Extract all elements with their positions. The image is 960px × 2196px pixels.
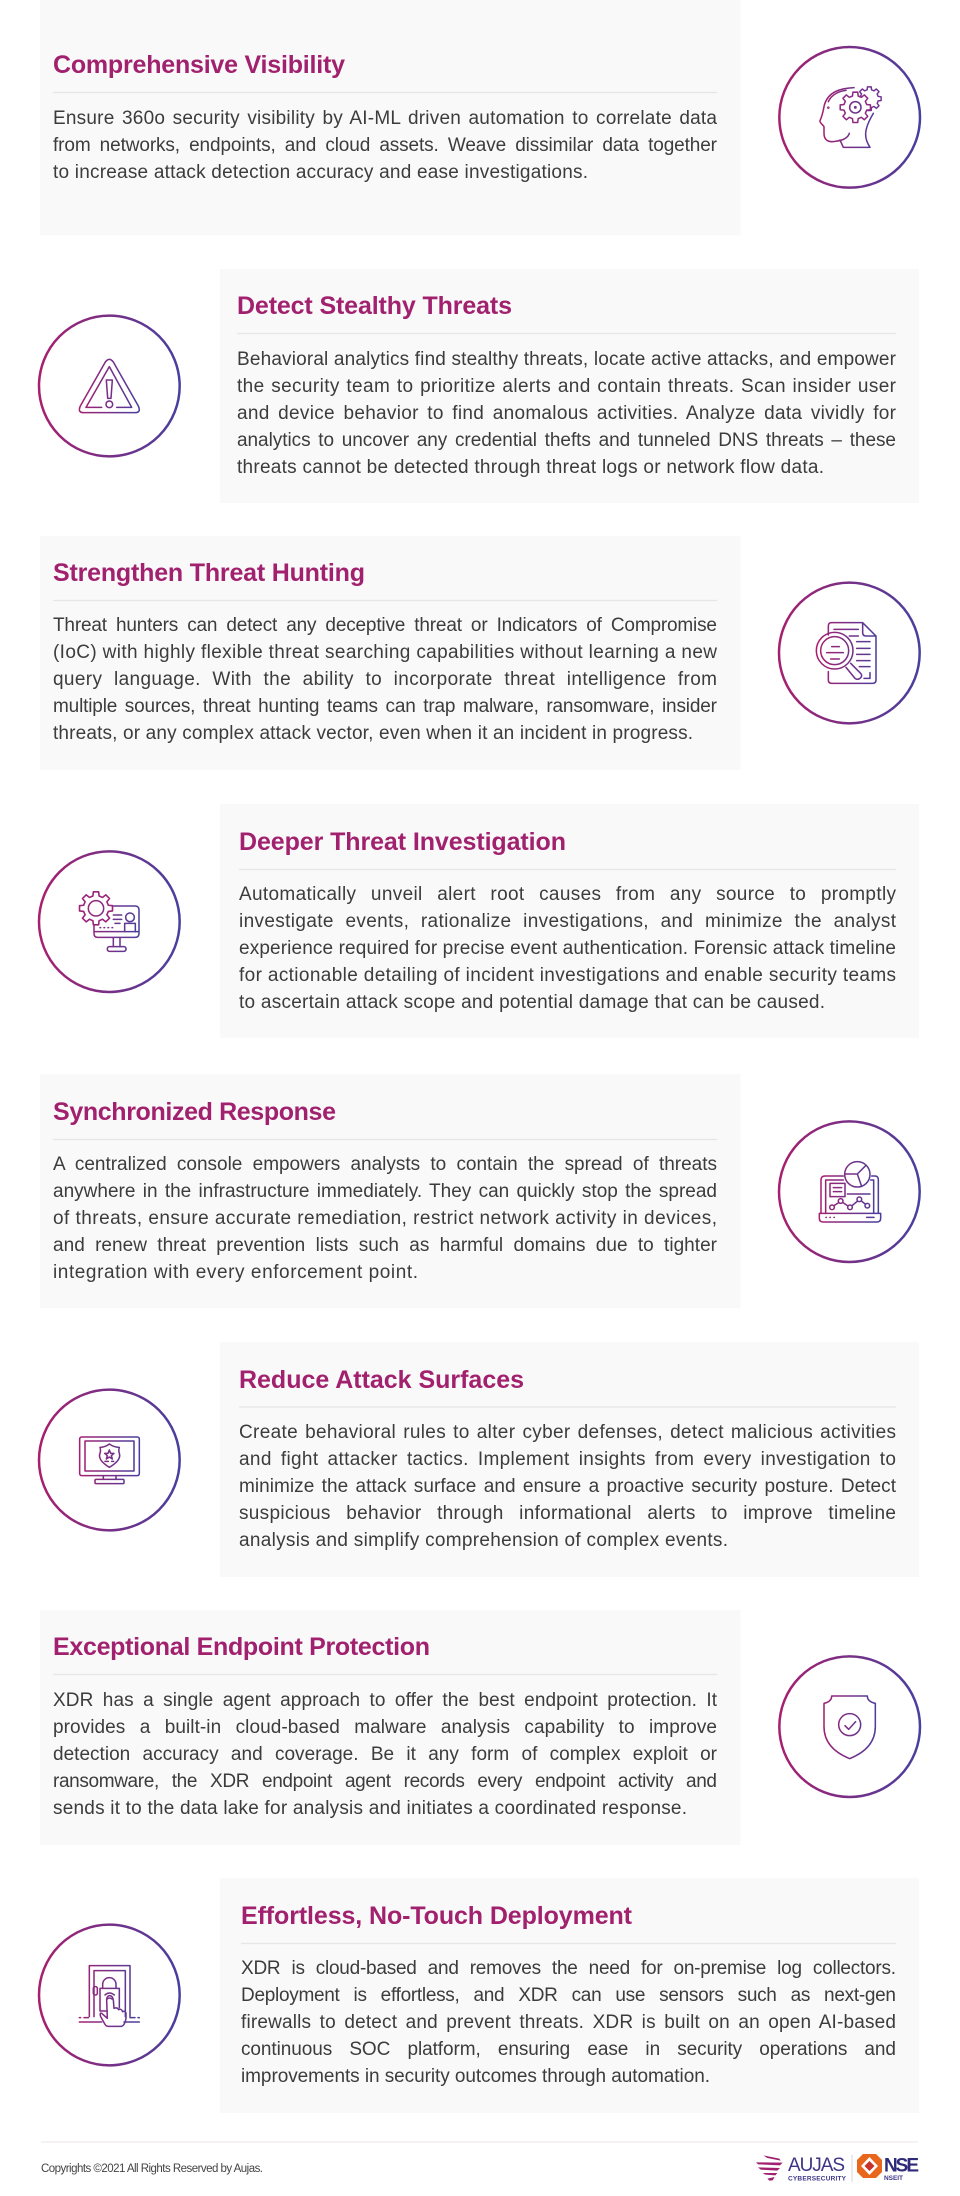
text block: deployment description: firewalls to detect and prevent threats. XDR is built on an open AI-based [241,2012,896,2033]
icon: Aujas swirl mark [756,2155,783,2181]
text block: stealthy threats description: threats cannot be detected through threat logs or network flow data. [237,457,824,478]
text block: response description: and renew threat prevention lists such as harmful domains due to tighter [53,1235,718,1256]
copyright text: Copyrights ©2021 All Rights Reserved by Aujas. [41,2163,263,2175]
icon: monitor with badge [39,1390,180,1530]
logo: NSE NSEIT: NSEIT [884,2175,903,2182]
panel: Detect Stealthy Threats [220,269,919,503]
text block: investigation description: Automatically unveil alert root causes from any source to promptly [239,884,896,905]
text block: visibility description [53,108,718,183]
text block: deployment description: XDR is cloud-based and removes the need for on-premise log collectors. [241,1958,896,1979]
panel: Reduce Attack Surfaces [220,1342,919,1577]
heading: Reduce Attack Surfaces: Reduce Attack Surfaces [239,1366,524,1394]
text block: threat hunting description: query language. With the ability to incorporate threat intelligence from [53,669,717,690]
panel: Deeper Threat Investigation [220,804,919,1038]
text block: response description: A centralized console empowers analysts to contain the spread of threats [53,1154,717,1175]
text block: stealthy threats description: Behavioral analytics find stealthy threats, locate active attacks, and empower [237,349,897,370]
heading: Comprehensive Visibility: Comprehensive Visibility [53,51,345,79]
text block: response description: of threats, ensure accurate remediation, restrict network activity in devices, [53,1208,717,1229]
text block: threat hunting description: threats, or any complex attack vector, even when it an incident in progress. [53,723,693,744]
icon: NSE octagon mark [857,2154,882,2178]
heading: Deeper Threat Investigation: Deeper Threat Investigation [239,828,566,856]
icon: laptop with charts [779,1121,920,1262]
logo: NSE NSEIT: NSE [884,2156,919,2176]
text block: investigation description: investigate events, rationalize investigations, and minimize the analyst [239,911,897,932]
logo: Aujas Cybersecurity: CYBERSECURITY [788,2176,847,2182]
text block: attack surfaces description: Create behavioral rules to alter cyber defenses, detect malicious activities [239,1422,896,1443]
heading: Synchronized Response: Synchronized Response [53,1098,336,1126]
heading: Strengthen Threat Hunting: Strengthen Threat Hunting [53,559,365,587]
text block: attack surfaces description: and fight attacker tactics. Implement insights from every investigation to [239,1449,896,1470]
text block: attack surfaces description: minimize the attack surface and ensure a proactive security posture. Detect [239,1476,897,1497]
text block: stealthy threats description: analytics to uncover any credential thefts and tunneled DNS threats – these [237,430,896,451]
text block: endpoint protection description: sends it to the data lake for analysis and initiates a coordinated response. [53,1798,687,1819]
panel: Effortless, No-Touch Deployment [220,1878,919,2113]
icon: gear and monitor with analyst [39,851,180,992]
panel: Synchronized Response [40,1074,740,1308]
text block: response description [53,1154,718,1283]
text block: threat hunting description: multiple sources, threat hunting teams can trap malware, ransomware, insider [53,696,718,717]
text block: stealthy threats description: the security team to prioritize alerts and contain threats. Scan insider user [237,376,897,397]
icon: shield with check [779,1656,920,1797]
heading: Exceptional Endpoint Protection: Exceptional Endpoint Protection [53,1633,430,1661]
text block: attack surfaces description: suspicious behavior through informational alerts to improve timeline [239,1503,896,1524]
text block: endpoint protection description: detection accuracy and coverage. Be it any form of complex exploit or [53,1744,718,1765]
text block: deployment description [241,1958,896,2087]
icon: head with gears [779,47,920,188]
text block: endpoint protection description [53,1690,718,1819]
text block: stealthy threats description [237,349,897,478]
heading: Detect Stealthy Threats: Detect Stealthy Threats [237,292,512,320]
text block: threat hunting description: (IoC) with highly flexible threat searching capabilities without learning a new [53,642,717,663]
footer [41,2142,919,2182]
text block: investigation description: to ascertain attack scope and potential damage that can be caused. [239,992,825,1013]
text block: response description: anywhere in the infrastructure immediately. They can quickly stop the spread [53,1181,717,1202]
text block: threat hunting description: Threat hunters can detect any deceptive threat or Indicators of Compromise [53,615,717,636]
panel: Comprehensive Visibility [40,0,740,236]
logo: Aujas Cybersecurity [756,2155,847,2182]
text block: visibility description: to increase attack detection accuracy and ease investigations. [53,162,588,183]
heading: Effortless, No-Touch Deployment: Effortless, No-Touch Deployment [241,1902,633,1930]
text block: deployment description: continuous SOC platform, ensuring ease in security operations and [241,2039,896,2060]
panel: Strengthen Threat Hunting [40,536,740,770]
text block: stealthy threats description: and device behavior to find anomalous activities. Analyze data vividly for [237,403,897,424]
text block: endpoint protection description: ransomware, the XDR endpoint agent records every endpoint activity and [53,1771,717,1792]
text block: attack surfaces description: analysis and simplify comprehension of complex events. [239,1530,728,1551]
text block: threat hunting description [53,615,718,744]
text block: response description: integration with every enforcement point. [53,1262,418,1283]
text block: deployment description: improvements in security outcomes through automation. [241,2066,710,2087]
icon: door lock with touching hand [39,1925,180,2065]
logo: NSE NSEIT [857,2154,919,2182]
text block: attack surfaces description [239,1422,897,1551]
text block: visibility description: Ensure 360o security visibility by AI-ML driven automation to correlate data [53,108,717,129]
text block: investigation description [239,884,897,1013]
text block: endpoint protection description: XDR has a single agent approach to offer the best endpoint protection. It [53,1690,718,1711]
panel: Exceptional Endpoint Protection [40,1610,740,1845]
text block: endpoint protection description: provides a built-in cloud-based malware analysis capability to improve [53,1717,717,1738]
icon: warning triangle [39,316,180,456]
icon: document with magnifier [779,583,920,723]
logo: Aujas Cybersecurity: AUJAS [788,2155,845,2176]
text block: deployment description: Deployment is effortless, and XDR can use sensors such as next-gen [241,1985,896,2006]
text block: investigation description: for actionable detailing of incident investigations and enable security teams [239,965,896,986]
text block: investigation description: experience required for precise event authentication. Forensic attack timeline [239,938,896,959]
text block: visibility description: from networks, endpoints, and cloud assets. Weave dissimilar data together [53,135,718,156]
